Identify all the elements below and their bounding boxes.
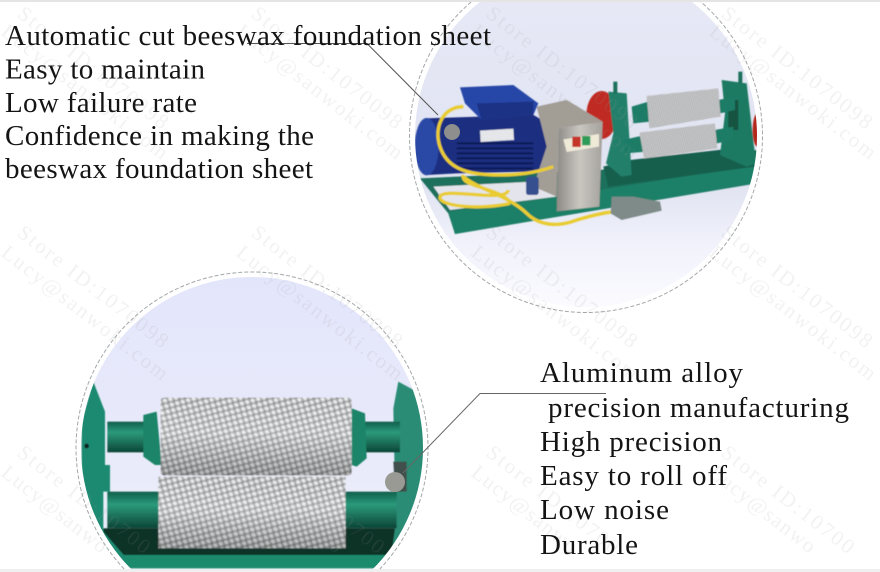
text block: machine features: Easy to maintain <box>5 54 206 86</box>
watermarks: Lucy@sanwoki.com <box>232 240 408 385</box>
watermarks: Store ID:1070098 <box>482 1 642 134</box>
illustration: roller close-up <box>82 382 425 568</box>
watermarks: Store ID:1070098 <box>482 220 642 353</box>
text block: machine features: Low failure rate <box>5 87 197 119</box>
illustration: full machine <box>415 72 762 234</box>
right frame <box>392 381 423 546</box>
electric motor <box>415 85 557 175</box>
watermarks: Store ID:1070098 <box>247 220 407 353</box>
watermarks: Lucy@sanwoki.com <box>705 240 880 385</box>
panel: top machine photo circle <box>409 2 762 312</box>
watermarks: Store ID:1070098 <box>717 220 877 353</box>
watermarks: Lucy@sanwoki.com <box>0 240 173 385</box>
text block: roller features: Durable <box>540 529 638 561</box>
watermarks: Store ID:1070098 <box>717 1 877 134</box>
text block: machine features <box>5 20 491 185</box>
leader line: motor callout <box>247 44 460 140</box>
left frame <box>82 382 127 568</box>
panel: roller close-up photo circle <box>76 272 428 569</box>
foot pedal <box>611 197 662 220</box>
watermarks: Store ID:10700 <box>247 440 389 559</box>
rollers <box>639 88 721 159</box>
watermarks: Lucy@sanwo <box>705 460 821 558</box>
machine base tray <box>420 150 757 234</box>
watermarks: Lucy@sanwo <box>467 460 583 558</box>
watermarks: Store ID:10700 <box>13 440 155 559</box>
threaded shafts and nuts <box>107 408 400 528</box>
stainless switch box <box>526 100 603 211</box>
watermarks: Lucy@sanwoki.com <box>467 240 643 385</box>
text block: roller features: High precision <box>540 426 722 458</box>
leader line: roller callout <box>385 394 606 492</box>
roller assembly <box>586 72 762 187</box>
watermarks: Lucy@sanwoki.com <box>705 19 880 164</box>
text block: machine features: Confidence in making the <box>5 120 314 152</box>
watermarks: Lucy@sanwoki.com <box>232 19 408 164</box>
text block: roller features: Aluminum alloy <box>540 357 744 389</box>
text block: machine features: beeswax foundation sheet <box>5 153 313 185</box>
watermarks: Store ID:10700 <box>482 440 624 559</box>
text block: machine features: Automatic cut beeswax foundation sheet <box>5 20 491 52</box>
upper knurled roller <box>161 398 352 475</box>
lower knurled roller <box>158 477 346 548</box>
watermarks: Lucy@sanwoki.com <box>467 19 643 164</box>
watermarks: Store ID:10700 <box>717 440 859 559</box>
lower dark cavity and base <box>103 528 400 568</box>
text block: roller features: Easy to roll off <box>540 460 727 492</box>
watermarks: Store ID:1070098 <box>13 1 173 134</box>
watermarks: Store ID:1070098 <box>247 1 407 134</box>
text block: roller features: precision manufacturing <box>548 392 849 424</box>
watermarks: Lucy@sanwo <box>232 460 348 558</box>
text block: roller features <box>540 357 849 561</box>
yellow cable <box>438 107 618 224</box>
text block: roller features: Low noise <box>540 494 669 526</box>
watermarks: Lucy@sanwoki.com <box>0 19 173 164</box>
watermarks: Store ID:1070098 <box>13 220 173 353</box>
watermarks: Lucy@sanwo <box>0 460 113 558</box>
